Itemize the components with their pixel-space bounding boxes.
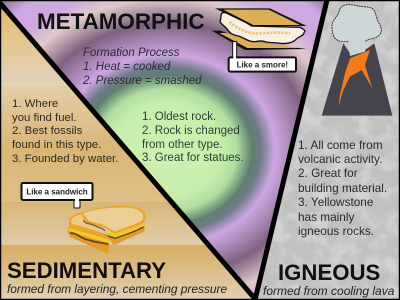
callout: like a smore: Like a smore! [237, 60, 288, 69]
text: igneous facts: has mainly [298, 210, 354, 224]
text: metamorphic facts: from other type. [142, 139, 223, 151]
text: igneous facts: 1. All come from [298, 138, 383, 152]
text: igneous facts: volcanic activity. [298, 152, 382, 166]
panel: sedimentary [0, 0, 260, 300]
text: metamorphic facts [142, 111, 244, 164]
text: formation process: Formation Process [83, 47, 180, 59]
panel: igneous [250, 0, 400, 300]
text: sedimentary facts: 2. Best fossils [12, 125, 83, 137]
text: igneous facts: building material. [298, 181, 387, 195]
text: igneous facts: 3. Yellowstone [298, 195, 374, 209]
title: sedimentary: SEDIMENTARY [7, 258, 166, 283]
text: formation process: 1. Heat = cooked [83, 61, 171, 73]
text: metamorphic facts: 2. Rock is changed [142, 125, 240, 137]
icon: volcano [322, 5, 392, 116]
title: igneous: IGNEOUS [278, 260, 380, 285]
subtitle: igneous: formed from cooling lava [263, 284, 395, 298]
title: metamorphic: METAMORPHIC [37, 9, 205, 34]
text: formation process: 2. Pressure = smashed [82, 75, 202, 87]
text: sedimentary facts: you find fuel. [12, 112, 77, 124]
callout: like a sandwich: Like a sandwich [26, 188, 88, 196]
text: sedimentary facts: 3. Founded by water. [12, 153, 118, 165]
text: sedimentary facts [12, 98, 118, 165]
text: metamorphic facts: 3. Great for statues. [142, 152, 244, 164]
subtitle: sedimentary: formed from layering, cementing pressure [7, 282, 227, 296]
text: igneous facts: igneous rocks. [298, 224, 374, 238]
text: metamorphic facts: 1. Oldest rock. [142, 111, 216, 123]
callout: like a sandwich [22, 183, 92, 208]
text: igneous facts [298, 138, 387, 238]
text: formation process [82, 47, 202, 87]
text: igneous facts: 2. Great for [298, 166, 358, 180]
text: sedimentary facts: 1. Where [12, 98, 58, 110]
icon: sandwich [68, 206, 146, 254]
icon: smore [212, 8, 307, 72]
text: sedimentary facts: found in this type. [12, 139, 101, 151]
